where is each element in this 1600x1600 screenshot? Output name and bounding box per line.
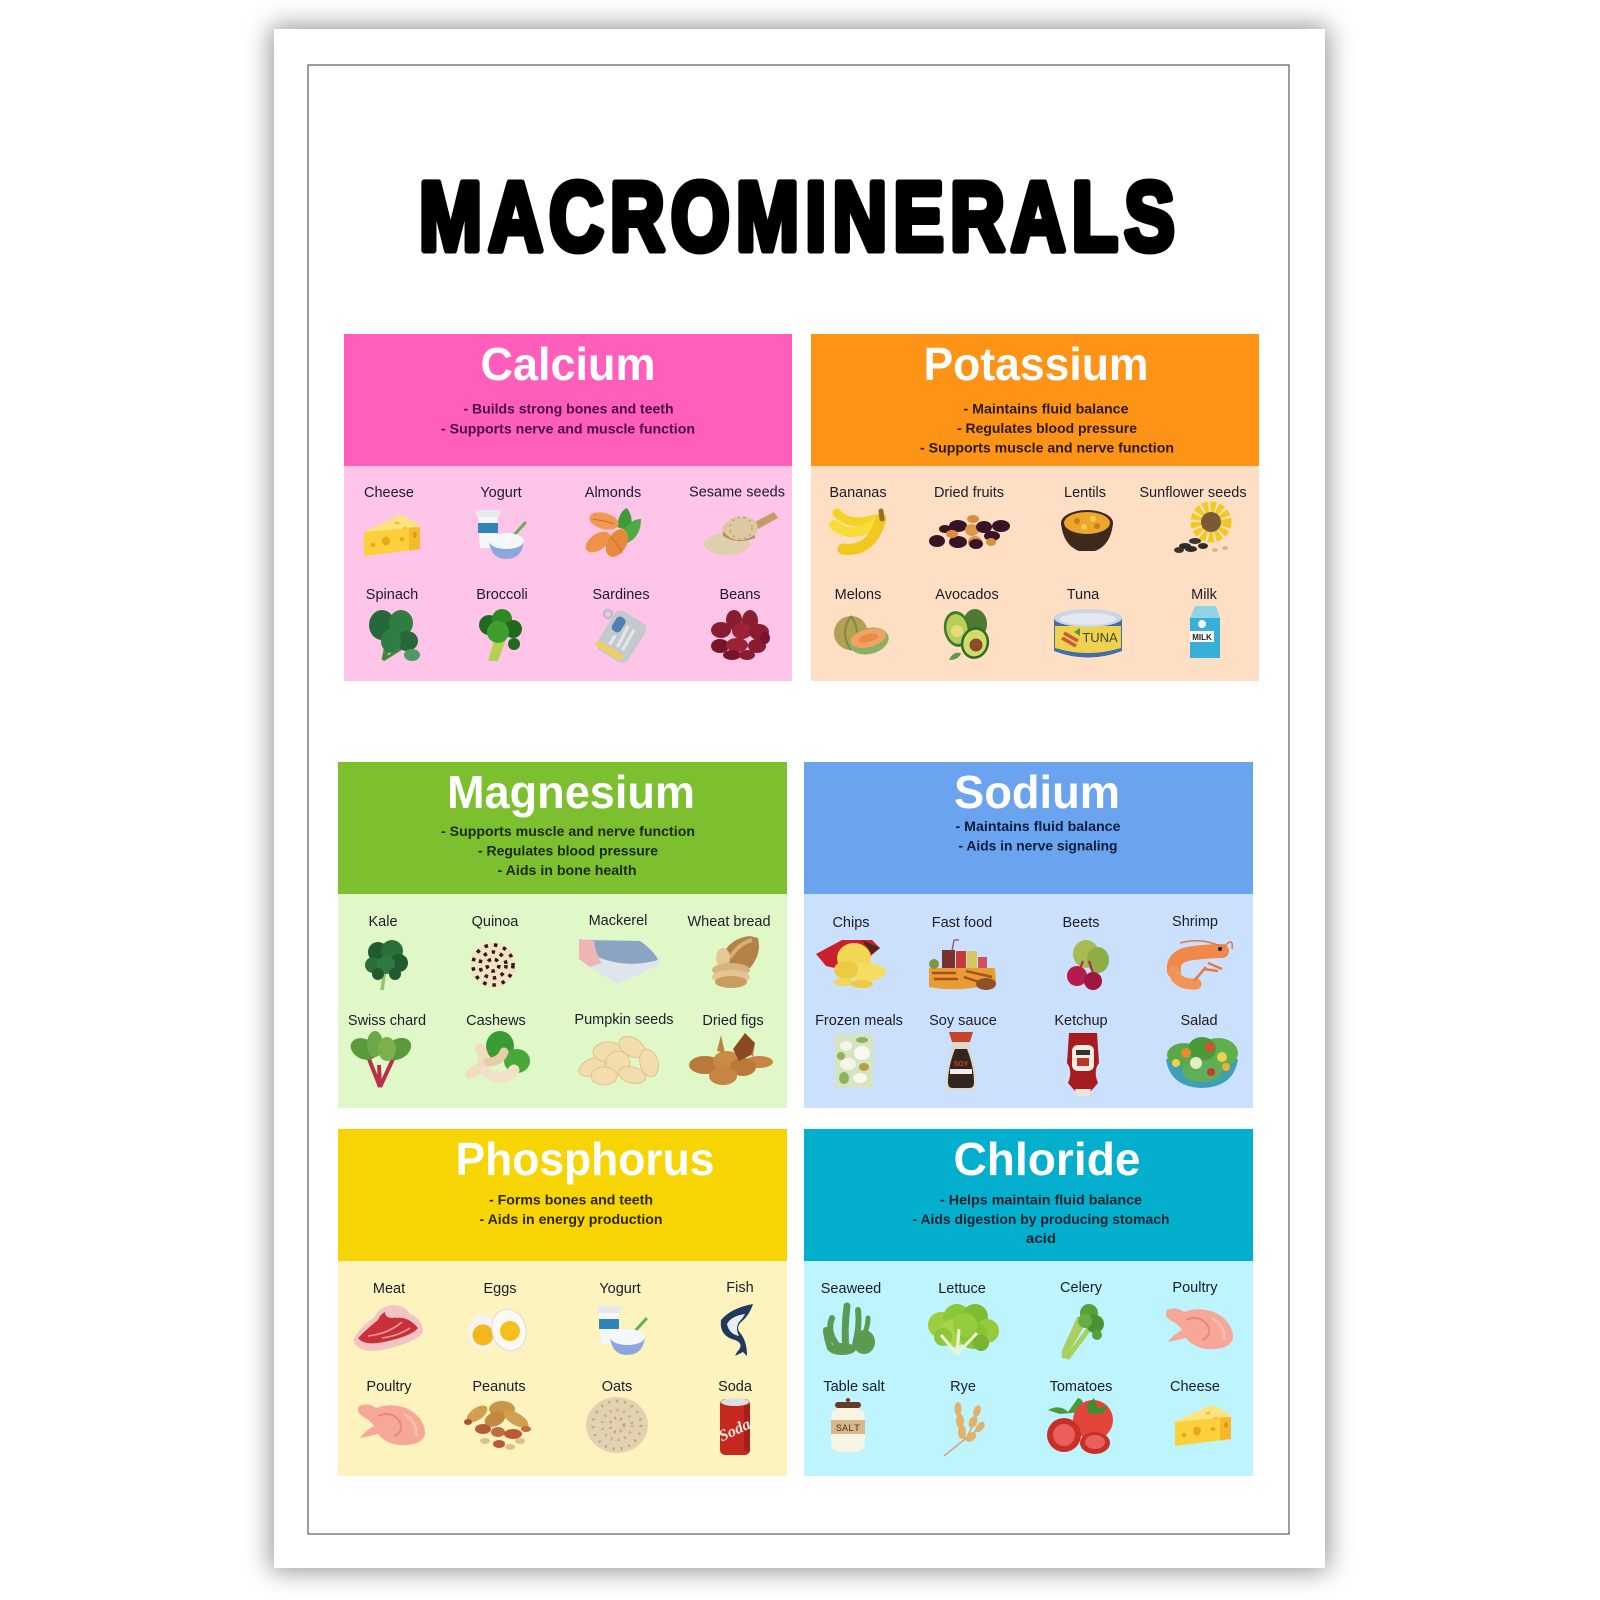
- food: spinach: [366, 587, 420, 661]
- food: quinoa: Quinoa: [472, 914, 519, 930]
- food: eggs: [469, 1281, 531, 1355]
- food: seaweed: [821, 1281, 881, 1355]
- food: fast food: Fast food: [932, 915, 992, 931]
- panel: phosphorus: [338, 1129, 787, 1476]
- chloride benefits: - Helps maintain fluid balance: [940, 1192, 1142, 1208]
- food: beets: Beets: [1062, 915, 1100, 931]
- food: cashews: Cashews: [466, 1013, 526, 1029]
- food: broccoli: Broccoli: [476, 587, 528, 603]
- food: poultry: Poultry: [366, 1379, 412, 1395]
- magnesium benefits: [441, 823, 695, 878]
- panel: magnesium: [338, 762, 787, 1108]
- food: milk: [1190, 587, 1220, 658]
- sodium header band: [804, 762, 1253, 894]
- calcium benefits: - Supports nerve and muscle function: [441, 420, 695, 436]
- poster card: [274, 29, 1325, 1568]
- calcium benefits: [441, 400, 695, 436]
- food: almonds: [582, 485, 641, 561]
- food: sesame seeds: [689, 484, 785, 555]
- food: yogurt: Yogurt: [599, 1281, 641, 1297]
- food: soda: Soda: [716, 1416, 753, 1445]
- calcium heading: Calcium: [480, 338, 656, 390]
- food: tuna: Tuna: [1067, 587, 1100, 603]
- food: oats: [586, 1379, 648, 1453]
- food: chips: Chips: [832, 915, 870, 931]
- inner frame: [308, 65, 1289, 1534]
- food: dried figs: [689, 1013, 773, 1085]
- phosphorus benefits: [480, 1192, 662, 1227]
- food: poultry: [1166, 1280, 1233, 1349]
- title: MACROMINERALS: [419, 163, 1181, 271]
- food: pumpkin seeds: Pumpkin seeds: [574, 1012, 674, 1028]
- food: poultry: Poultry: [1172, 1280, 1218, 1296]
- food: sardines: Sardines: [592, 587, 650, 603]
- food: chips: [816, 915, 886, 988]
- food: sardines: [592, 587, 650, 666]
- food: spinach: Spinach: [366, 587, 418, 603]
- sodium heading: Sodium: [954, 766, 1120, 818]
- food: seaweed: Seaweed: [821, 1281, 881, 1297]
- food: milk: Milk: [1191, 587, 1218, 603]
- food: yogurt: [476, 485, 525, 559]
- food: mackerel: Mackerel: [589, 913, 647, 929]
- food: kale: Kale: [368, 914, 398, 930]
- chloride food area: [804, 1261, 1253, 1476]
- phosphorus header band: [338, 1129, 787, 1261]
- phosphorus benefits: - Forms bones and teeth: [489, 1192, 653, 1208]
- food: meat: Meat: [373, 1281, 405, 1297]
- calcium header band: [344, 334, 792, 466]
- food: fast food: [929, 915, 996, 990]
- chloride heading: Chloride: [954, 1133, 1140, 1185]
- food: wheat bread: [687, 914, 771, 988]
- food: dried fruits: Dried fruits: [934, 485, 1004, 501]
- food: beans: [711, 587, 770, 660]
- sodium benefits: - Aids in nerve signaling: [958, 838, 1118, 854]
- chloride benefits: [912, 1192, 1170, 1246]
- food: ketchup: Ketchup: [1054, 1013, 1108, 1029]
- food: sunflower seeds: [1139, 485, 1247, 553]
- food: salad: Salad: [1180, 1013, 1218, 1029]
- magnesium benefits: - Aids in bone health: [498, 862, 636, 878]
- food: oats: Oats: [602, 1379, 632, 1395]
- food: rye: Rye: [950, 1379, 976, 1395]
- food: broccoli: [476, 587, 528, 661]
- food: cheese: [1170, 1379, 1231, 1446]
- food: cheese: Cheese: [364, 485, 414, 501]
- food: wheat bread: Wheat bread: [687, 914, 771, 930]
- food: mackerel: [579, 913, 661, 984]
- food: soy sauce: Soy sauce: [929, 1013, 997, 1029]
- food: milk: MILK: [1192, 633, 1212, 642]
- food: poultry: [358, 1379, 425, 1445]
- potassium benefits: [920, 400, 1174, 456]
- food: tomatoes: [1047, 1379, 1113, 1454]
- food: swiss chard: Swiss chard: [348, 1013, 426, 1029]
- magnesium heading: Magnesium: [447, 766, 695, 818]
- food: swiss chard: [347, 1013, 426, 1087]
- food: lentils: Lentils: [1064, 485, 1106, 501]
- food: peanuts: Peanuts: [472, 1379, 526, 1395]
- food: tomatoes: Tomatoes: [1050, 1379, 1112, 1395]
- food: soda: Soda: [718, 1379, 753, 1395]
- food: beets: [1062, 915, 1109, 990]
- phosphorus benefits: - Aids in energy production: [480, 1211, 662, 1227]
- food: tuna: TUNA: [1082, 630, 1118, 645]
- food: fish: Fish: [726, 1280, 754, 1296]
- food: beans: Beans: [719, 587, 761, 603]
- food: cashews: [466, 1013, 530, 1078]
- food: dried fruits: [929, 485, 1010, 549]
- food: shrimp: Shrimp: [1172, 914, 1218, 930]
- calcium food area: [344, 466, 792, 681]
- food: celery: Celery: [1060, 1280, 1103, 1296]
- food: soy sauce: SOY: [954, 1061, 969, 1068]
- potassium benefits: - Regulates blood pressure: [957, 420, 1137, 436]
- food: dried figs: Dried figs: [702, 1013, 764, 1029]
- food: celery: [1060, 1280, 1104, 1357]
- sodium food area: [804, 894, 1253, 1108]
- magnesium header band: [338, 762, 787, 894]
- magnesium food area: [338, 894, 787, 1108]
- food: almonds: Almonds: [585, 485, 641, 501]
- food: table salt: SALT: [836, 1424, 860, 1435]
- food: table salt: Table salt: [823, 1379, 885, 1395]
- food: lentils: [1061, 485, 1113, 551]
- food: frozen meals: [815, 1013, 903, 1088]
- food: melons: [834, 587, 892, 658]
- food: avocados: [935, 587, 999, 662]
- food: meat: [353, 1281, 423, 1351]
- magnesium benefits: - Regulates blood pressure: [478, 842, 658, 858]
- panel: calcium: [344, 334, 792, 681]
- food: bananas: [829, 485, 887, 549]
- food: cheese: Cheese: [1170, 1379, 1220, 1395]
- calcium benefits: - Builds strong bones and teeth: [464, 400, 674, 416]
- food: shrimp: [1172, 914, 1232, 984]
- chloride header band: [804, 1129, 1253, 1261]
- food: lettuce: Lettuce: [938, 1281, 986, 1297]
- food: soy sauce: [929, 1013, 997, 1090]
- food: salad: [1166, 1013, 1238, 1088]
- sodium benefits: [956, 818, 1121, 854]
- food: tuna: [1054, 587, 1122, 658]
- food: soda: [716, 1379, 753, 1455]
- food: frozen meals: Frozen meals: [815, 1013, 903, 1029]
- sodium benefits: - Maintains fluid balance: [956, 818, 1121, 834]
- phosphorus food area: [338, 1261, 787, 1476]
- food: lettuce: [928, 1281, 999, 1354]
- panel: potassium: [811, 334, 1259, 681]
- food: kale: [365, 914, 408, 990]
- food: sesame seeds: Sesame seeds: [689, 484, 785, 500]
- food: eggs: Eggs: [483, 1281, 517, 1297]
- food: pumpkin seeds: [574, 1012, 674, 1086]
- food: table salt: [823, 1379, 885, 1452]
- food: cheese: [364, 485, 420, 556]
- magnesium benefits: - Supports muscle and nerve function: [441, 823, 695, 839]
- potassium header band: [811, 334, 1259, 466]
- food: yogurt: Yogurt: [480, 485, 522, 501]
- potassium benefits: - Maintains fluid balance: [964, 400, 1129, 416]
- food: yogurt: [597, 1281, 646, 1355]
- potassium benefits: - Supports muscle and nerve function: [920, 440, 1174, 456]
- food: peanuts: [464, 1379, 531, 1450]
- panel: sodium: [804, 762, 1253, 1108]
- potassium heading: Potassium: [924, 338, 1148, 390]
- food: quinoa: [470, 914, 519, 988]
- food: sunflower seeds: Sunflower seeds: [1139, 485, 1247, 501]
- food: melons: Melons: [835, 587, 881, 603]
- phosphorus heading: Phosphorus: [456, 1133, 714, 1185]
- food: avocados: Avocados: [935, 587, 999, 603]
- food: rye: [944, 1379, 987, 1456]
- chloride benefits: acid: [1026, 1230, 1056, 1246]
- food: ketchup: [1054, 1013, 1108, 1096]
- food: fish: [721, 1280, 754, 1356]
- chloride benefits: - Aids digestion by producing stomach: [912, 1211, 1170, 1227]
- panel: chloride: [804, 1129, 1253, 1476]
- potassium food area: [811, 466, 1259, 681]
- food: bananas: Bananas: [829, 485, 887, 501]
